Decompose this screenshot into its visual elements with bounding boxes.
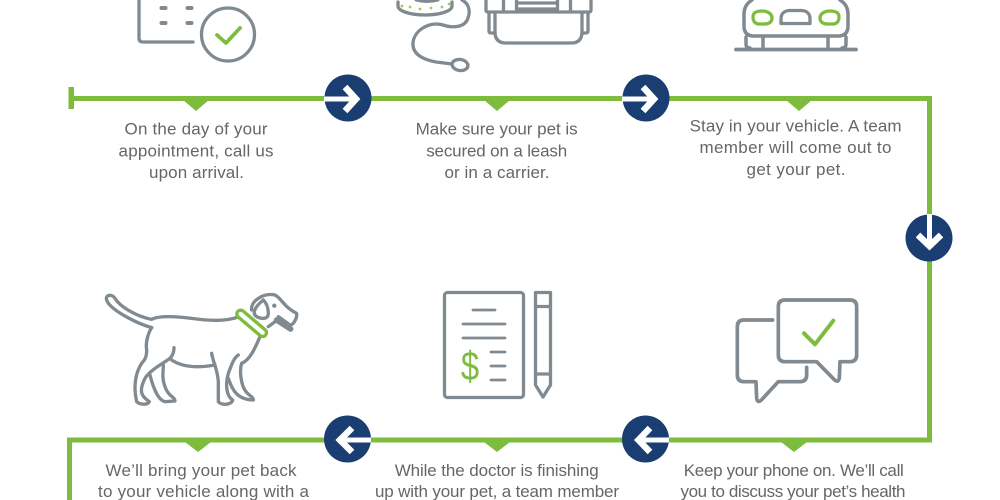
arrow button: right 1: [324, 74, 372, 122]
icon: chat bubbles with check: [737, 300, 857, 401]
step 4 text: Keep your phone on. We’ll call: [684, 461, 904, 480]
arrow button: left 2: [622, 416, 669, 462]
icon: invoice and pencil: $: [461, 342, 479, 389]
step 3 text: member will come out to: [699, 138, 891, 157]
step 1 text: On the day of your: [125, 120, 268, 138]
step 6 text: We’ll bring your pet back: [106, 461, 297, 480]
timeline path: [68, 87, 930, 500]
icon: collar and leash: [398, 0, 469, 72]
step 2 text: Make sure your pet is: [416, 120, 578, 138]
icon: invoice and pencil: [444, 292, 550, 398]
icon: dog with collar: [106, 295, 297, 404]
icon: calendar with check: [139, 0, 254, 61]
icon: pet carrier: [486, 0, 591, 43]
step 3 text: get your pet.: [746, 160, 846, 179]
step 2 text: or in a carrier.: [444, 163, 550, 182]
arrow button: right 2: [622, 74, 670, 122]
arrow button: down: [906, 214, 952, 262]
step 1 text: appointment, call us: [119, 142, 274, 160]
icon: car front: [736, 0, 856, 50]
step 1 text: upon arrival.: [149, 163, 244, 182]
arrow button: left 1: [324, 416, 371, 462]
step 2 text: secured on a leash: [426, 142, 567, 160]
step 5 text: While the doctor is finishing: [395, 461, 599, 480]
step 3 text: Stay in your vehicle. A team: [690, 116, 902, 136]
